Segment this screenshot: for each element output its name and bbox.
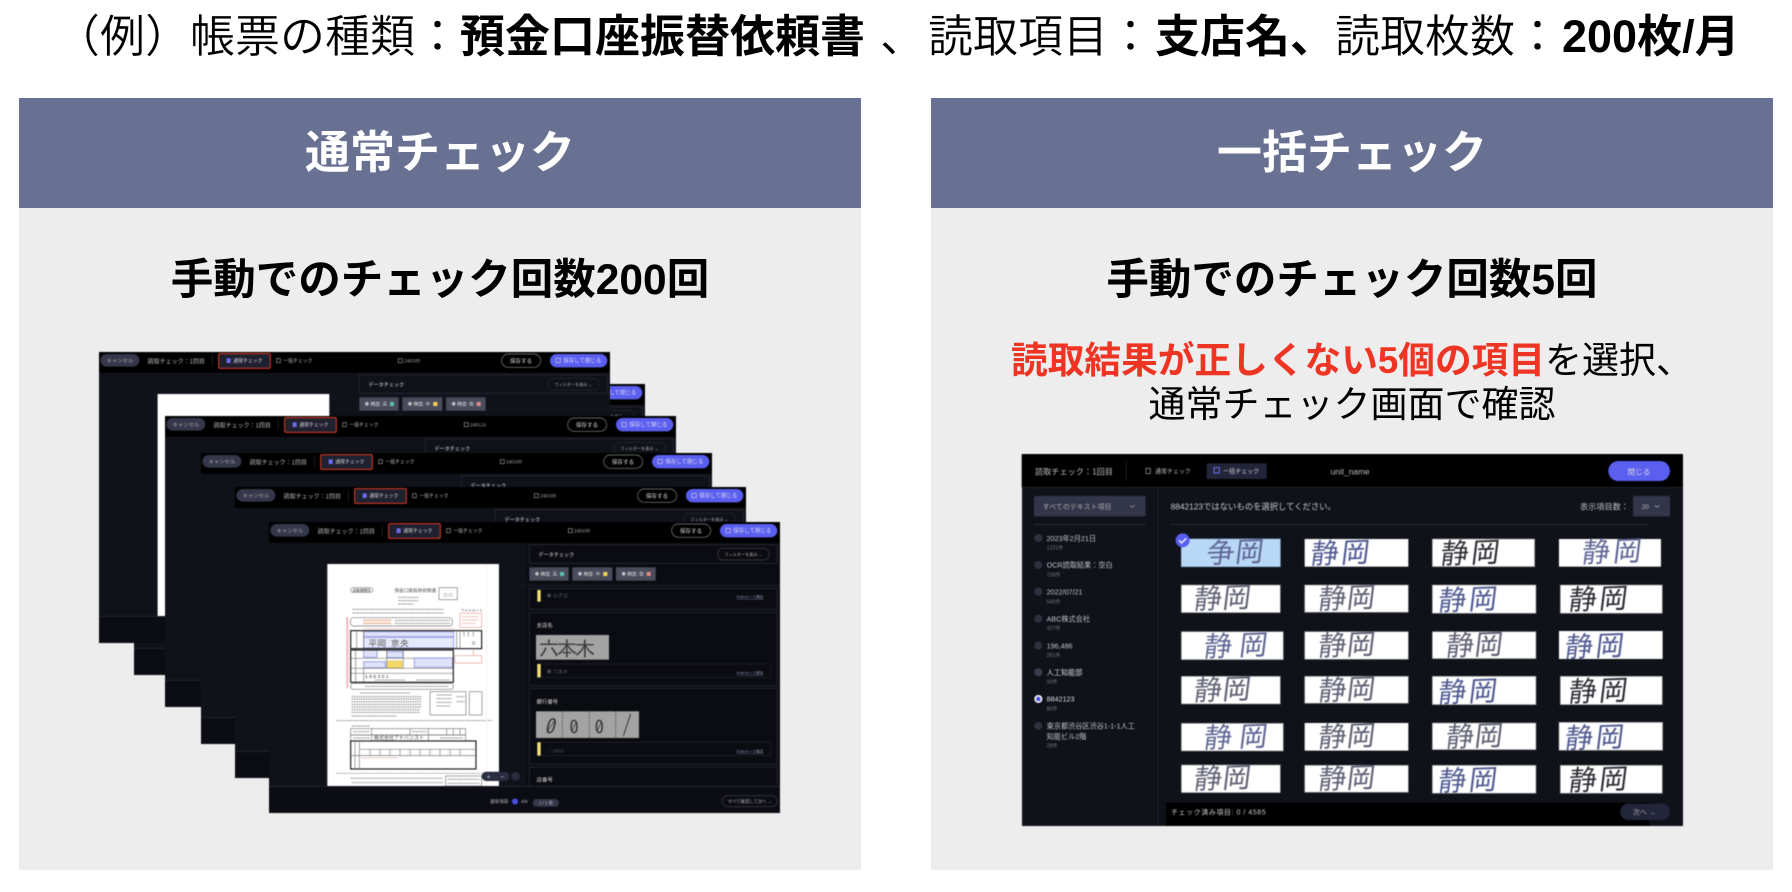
form document: 預金口座振替依頼書 [394, 587, 437, 594]
data check column: 0 [569, 719, 579, 737]
top bar left: 一括チェック [453, 528, 483, 535]
screen 3 back: 一括チェック [349, 422, 379, 429]
subheading: manual checks 5: 手動でのチェック回数5回 [1106, 257, 1598, 304]
screenshot: right half: 静岡 [1316, 629, 1378, 660]
screenshot: right half: 静岡 [1436, 764, 1502, 795]
screen 3 back: 保存して閉じる [629, 421, 667, 429]
screenshot: left half: 2022/07/21 [1047, 589, 1082, 597]
screenshot: right half: 静岡 [1316, 674, 1378, 705]
icon: selected check [1176, 533, 1190, 547]
data check column: 六本木 [539, 638, 595, 659]
screenshot: right half: 静岡 [1444, 629, 1505, 660]
screenshot: right half: 静岡 [1563, 722, 1628, 753]
screen 1 back: 読取チェック：1回目 [148, 357, 205, 365]
screenshot: left half: 静岡 [1192, 582, 1253, 613]
screen 3 back [165, 416, 676, 707]
top bar left: 通常チェック [403, 528, 433, 535]
data check column: 銀行番号 [537, 697, 559, 705]
screen 1 back [99, 352, 610, 643]
data check column: Enterキーで確定 [737, 670, 764, 675]
title: 支店名、 [1155, 11, 1335, 62]
screenshot: left half: OCR読取結果：空白 [1047, 561, 1113, 570]
footer bar: 通常項目 [490, 798, 508, 805]
title: （例）帳票の種類： [55, 11, 460, 62]
screenshot: left half: 728件 [1047, 570, 1060, 578]
data check column: Enterキーで確定 [737, 748, 764, 753]
bulk check screenshot [1022, 454, 1683, 826]
data check column: ◉ 精度: 高 [535, 571, 558, 578]
screenshot: right half: unit_name [1331, 467, 1370, 477]
screenshot: left half [1022, 454, 1683, 826]
title: 読取項目： [928, 11, 1153, 62]
heading: bulk check [931, 98, 1773, 208]
data check column: ◉ 精度: 低 [621, 571, 644, 578]
panel: bulk check [931, 98, 1773, 870]
screenshot: left half: 2023年2月21日 [1047, 534, 1096, 543]
data check column: 保存して閉じる [733, 527, 771, 535]
screen 3 back: キャンセル [173, 422, 200, 429]
screen 5 back: 一括チェック [419, 493, 449, 500]
data check column: 240109 [574, 529, 590, 535]
screen 1 back: ◉ 精度: 中 [408, 401, 431, 408]
screen 5 back: キャンセル [243, 493, 270, 500]
data check column: Enterキーで確定 [737, 594, 764, 599]
screen 1 back: 240109 [404, 359, 420, 365]
screenshot: left half: 知能ビル2階 [1047, 732, 1086, 741]
screen 1 back: フィルターを表示 ⌄ [554, 381, 592, 387]
form document: 金融機関用 [353, 587, 371, 592]
screen 4 back: 保存して閉じる [665, 458, 703, 466]
screenshot: left half: 静岡 [1192, 674, 1253, 705]
screenshot: left half: 静岡 [1192, 762, 1253, 793]
screenshot: left half: 281件 [1047, 651, 1060, 659]
screenshot: left half: 427件 [1047, 624, 1060, 632]
data check column: ◉ 六本木 [547, 669, 568, 676]
screen 4 back: 読取チェック：1回目 [250, 458, 307, 466]
heading: normal check [19, 98, 861, 208]
screen 4 back: 240109 [506, 460, 522, 466]
heading: bulk check: 一括チェック [1217, 127, 1487, 178]
screen 4 back [201, 453, 712, 744]
title: 読取枚数： [1335, 11, 1560, 62]
screen 5 back: フィルターを表示 ⌄ [690, 516, 728, 522]
screenshot: left half: 8842123 [1047, 696, 1075, 704]
description text: 読取結果が正しくない5個の項目を選択、 [1011, 340, 1693, 381]
screenshot: right half: 静岡 [1580, 536, 1647, 567]
footer bar: 1 / 1 枚 [539, 800, 554, 807]
data check column [520, 524, 780, 786]
screen 1 back: 保存して閉じる [563, 357, 601, 365]
heading: normal check: 通常チェック [305, 127, 575, 178]
screen 2 back: 保存して閉じる [598, 389, 636, 397]
panel: normal check [19, 98, 861, 870]
screenshot: right half: 表示項目数： [1580, 501, 1629, 511]
form document: 印 [472, 640, 476, 645]
screen 2 back: 保存する [545, 389, 567, 397]
screenshot: right half: 静岡 [1439, 537, 1504, 568]
screen 1 back: ◉ 精度: 高 [365, 401, 388, 408]
form document: ◎ ◎ [443, 592, 453, 598]
screen 3 back: 保存する [576, 421, 598, 429]
screenshot: right half: 閉じる [1627, 467, 1650, 476]
screen 1 back: データチェック [368, 380, 404, 388]
screen 3 back: データチェック [434, 444, 470, 452]
screen 3 back: フィルターを表示 ⌄ [620, 445, 658, 451]
screenshot: left half: 一括チェック [1223, 467, 1259, 475]
screenshot: right half: 静岡 [1567, 675, 1632, 706]
data check column: 0 [595, 719, 604, 737]
title: 200枚/月 [1562, 11, 1740, 62]
screen 3 back: 通常チェック [299, 422, 329, 429]
screenshot: right half [1305, 461, 1670, 820]
screen 3 back: 読取チェック：1回目 [214, 421, 271, 429]
screenshot: left half: 28件 [1047, 742, 1058, 750]
screen 1 back: 保存する [510, 357, 532, 365]
screen 5 back: データチェック [504, 515, 540, 523]
screenshot: right half: 静岡 [1316, 762, 1378, 793]
title [55, 11, 1740, 62]
form document: 1 8 6 3 0 1 [365, 674, 389, 680]
screenshot: left half: 85件 [1047, 704, 1058, 712]
screenshot: left half: 8842123ではないものを選択してください。 [1171, 501, 1336, 511]
screenshot: right half: 静岡 [1567, 764, 1632, 795]
screenshot: left half: 人工知能部 [1047, 668, 1082, 677]
screenshot: left half: 争岡 [1205, 536, 1266, 567]
screen 4 back: データチェック [470, 481, 506, 489]
screen 5 back: 保存して閉じる [699, 492, 737, 500]
screen 1 back: キャンセル [107, 358, 134, 365]
description text [1011, 340, 1693, 425]
screen 5 back: 240109 [540, 494, 556, 500]
screenshot: left half: 1221件 [1047, 543, 1063, 551]
data check column: ◯ 0001 [547, 747, 564, 754]
form document: 平岡 京央 [368, 640, 409, 649]
screen 5 back [235, 487, 746, 778]
screenshot: right half: 20 [1642, 504, 1649, 511]
data check column: ◉ 精度: 中 [578, 571, 601, 578]
screen 5 back: 保存する [646, 492, 668, 500]
form document: 株式会社アドバンスト [374, 735, 424, 742]
screenshot: right half: 静岡 [1309, 537, 1374, 568]
screenshot: right half: 静岡 [1563, 630, 1628, 661]
stacked screenshots [99, 352, 780, 813]
screenshot: right half: 静岡 [1444, 720, 1505, 751]
screen 5 back: 読取チェック：1回目 [284, 492, 341, 500]
screenshot: left half: すべてのテキスト項目 [1043, 503, 1112, 511]
screen 3 back: 240124 [470, 423, 486, 429]
screenshot: left half: チェック済み項目: 0 / 4585 [1171, 808, 1266, 817]
description text: 通常チェック画面で確認 [1148, 384, 1556, 425]
screen 2 back [134, 384, 645, 675]
data check column: データチェック [538, 550, 574, 558]
data check column: 店番号 [537, 776, 553, 783]
screen 6 front [269, 522, 780, 813]
screenshot: left half: 通常チェック [1155, 467, 1191, 475]
screenshot: left half: 540件 [1047, 597, 1060, 605]
screenshot: right half: 静岡 [1316, 720, 1378, 751]
footer bar: すべて確認して次へ → [728, 798, 772, 805]
title: 、 [880, 11, 925, 62]
screenshot: left half: 静岡 [1202, 721, 1277, 752]
top bar left: 読取チェック：1回目 [318, 527, 375, 535]
screen 4 back: キャンセル [209, 459, 236, 466]
subheading: manual checks 200: 手動でのチェック回数200回 [171, 257, 709, 304]
screen 1 back: 一括チェック [283, 358, 313, 365]
screen 4 back: 一括チェック [385, 459, 415, 466]
screen 5 back: 通常チェック [369, 493, 399, 500]
title: 預金口座振替依頼書 [460, 11, 865, 62]
footer bar [269, 786, 780, 813]
data check column: フィルターを表示 ⌄ [724, 551, 762, 557]
screenshot: left half: 196,486 [1047, 642, 1073, 650]
screen 2 back: フィルターを表示 ⌄ [589, 413, 627, 419]
screenshot: right half: 静岡 [1436, 676, 1502, 707]
top bar left: キャンセル [277, 528, 304, 535]
zoom controls [482, 772, 520, 781]
data check column: 0 [544, 717, 558, 737]
screenshot: right half: 静岡 [1436, 584, 1502, 615]
zoom controls: − [500, 774, 504, 781]
screen 1 back: 通常チェック [233, 358, 263, 365]
screen 4 back: 保存する [612, 458, 634, 466]
screen 1 back: ◉ 精度: 低 [451, 401, 474, 408]
screenshot: right half: 静岡 [1316, 582, 1378, 613]
zoom controls: + [486, 774, 491, 781]
top bar left [269, 522, 780, 543]
data check column: 支店名 [537, 621, 553, 629]
screenshot: left half: 東京都渋谷区渋谷1-1-1人工 [1047, 721, 1135, 730]
screenshot: right half: 静岡 [1567, 583, 1632, 614]
footer bar: 4/9 [521, 799, 528, 804]
screenshot: left half: 読取チェック：1回目 [1035, 467, 1113, 477]
form document: ワイドルート [461, 608, 483, 613]
data check column: 保存する [680, 527, 702, 535]
screenshot: left half: 静岡 [1202, 630, 1277, 661]
data check column: ◉ みずほ [547, 593, 568, 600]
screenshot: right half: 次へ → [1633, 807, 1656, 816]
form document [327, 564, 499, 786]
screen 4 back: 通常チェック [335, 459, 365, 466]
screenshot: left half: 93件 [1047, 678, 1058, 686]
screenshot: left half: ABC株式会社 [1047, 614, 1090, 623]
